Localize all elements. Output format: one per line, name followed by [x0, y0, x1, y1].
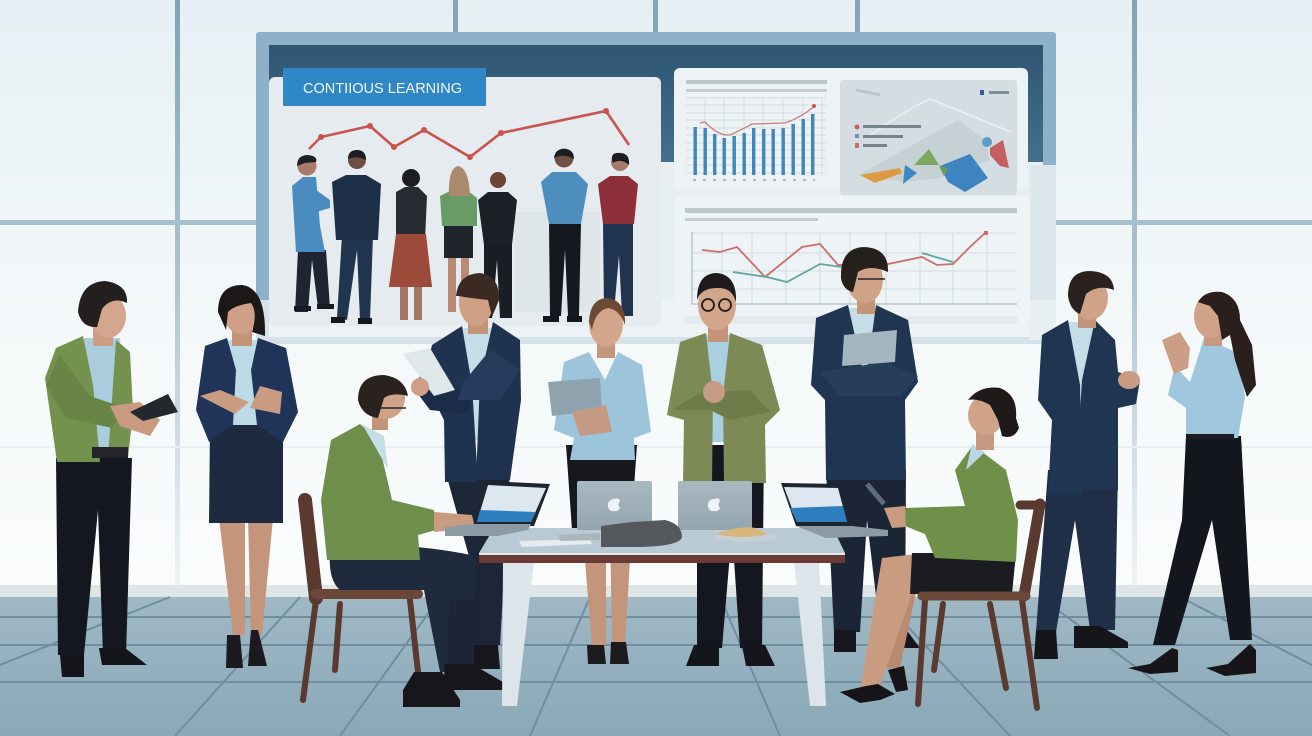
small person: red skirt — [389, 169, 432, 320]
small person: blue shirt back — [541, 148, 588, 322]
person: man in navy with tablet — [811, 247, 920, 652]
small person: blue shirt — [292, 155, 334, 312]
papers on table — [519, 533, 600, 547]
window frame lines — [0, 0, 1312, 585]
person: man in navy right — [1034, 271, 1140, 659]
red trend line — [309, 108, 629, 160]
person: woman in light blue shirt — [548, 298, 651, 664]
map panel — [840, 80, 1017, 195]
panel: continuous learning — [269, 68, 661, 326]
small person: red sweater — [598, 153, 638, 316]
chair: left — [303, 500, 418, 700]
laptop: silver right — [678, 481, 752, 530]
person: woman with ponytail — [1128, 292, 1256, 676]
chair: right — [918, 504, 1042, 708]
presentation board — [256, 32, 1056, 344]
small person: black dress — [478, 172, 517, 318]
label banner — [283, 68, 486, 106]
laptop: left — [445, 481, 550, 536]
person: seated man in green blazer — [321, 375, 503, 707]
person: man in olive blazer — [667, 273, 780, 666]
small team on the board — [292, 148, 638, 324]
label banner: CONTIIOUS LEARNING — [303, 80, 462, 97]
person: man standing with paper — [403, 273, 521, 669]
floor — [0, 585, 1312, 736]
bar chart — [686, 98, 826, 180]
small person: dark suit — [331, 150, 381, 324]
laptop: silver left — [577, 481, 652, 530]
small person: green top — [440, 166, 477, 312]
panel: bar chart and map — [674, 68, 1028, 195]
panel: line chart — [674, 196, 1030, 326]
meeting table — [445, 481, 888, 706]
laptop: right — [781, 483, 888, 538]
person: woman in navy blazer — [196, 285, 298, 668]
plate of food — [713, 527, 777, 542]
person: seated woman in green blazer — [840, 388, 1019, 703]
person: woman in green blazer — [45, 281, 178, 677]
grey bag — [601, 520, 682, 547]
